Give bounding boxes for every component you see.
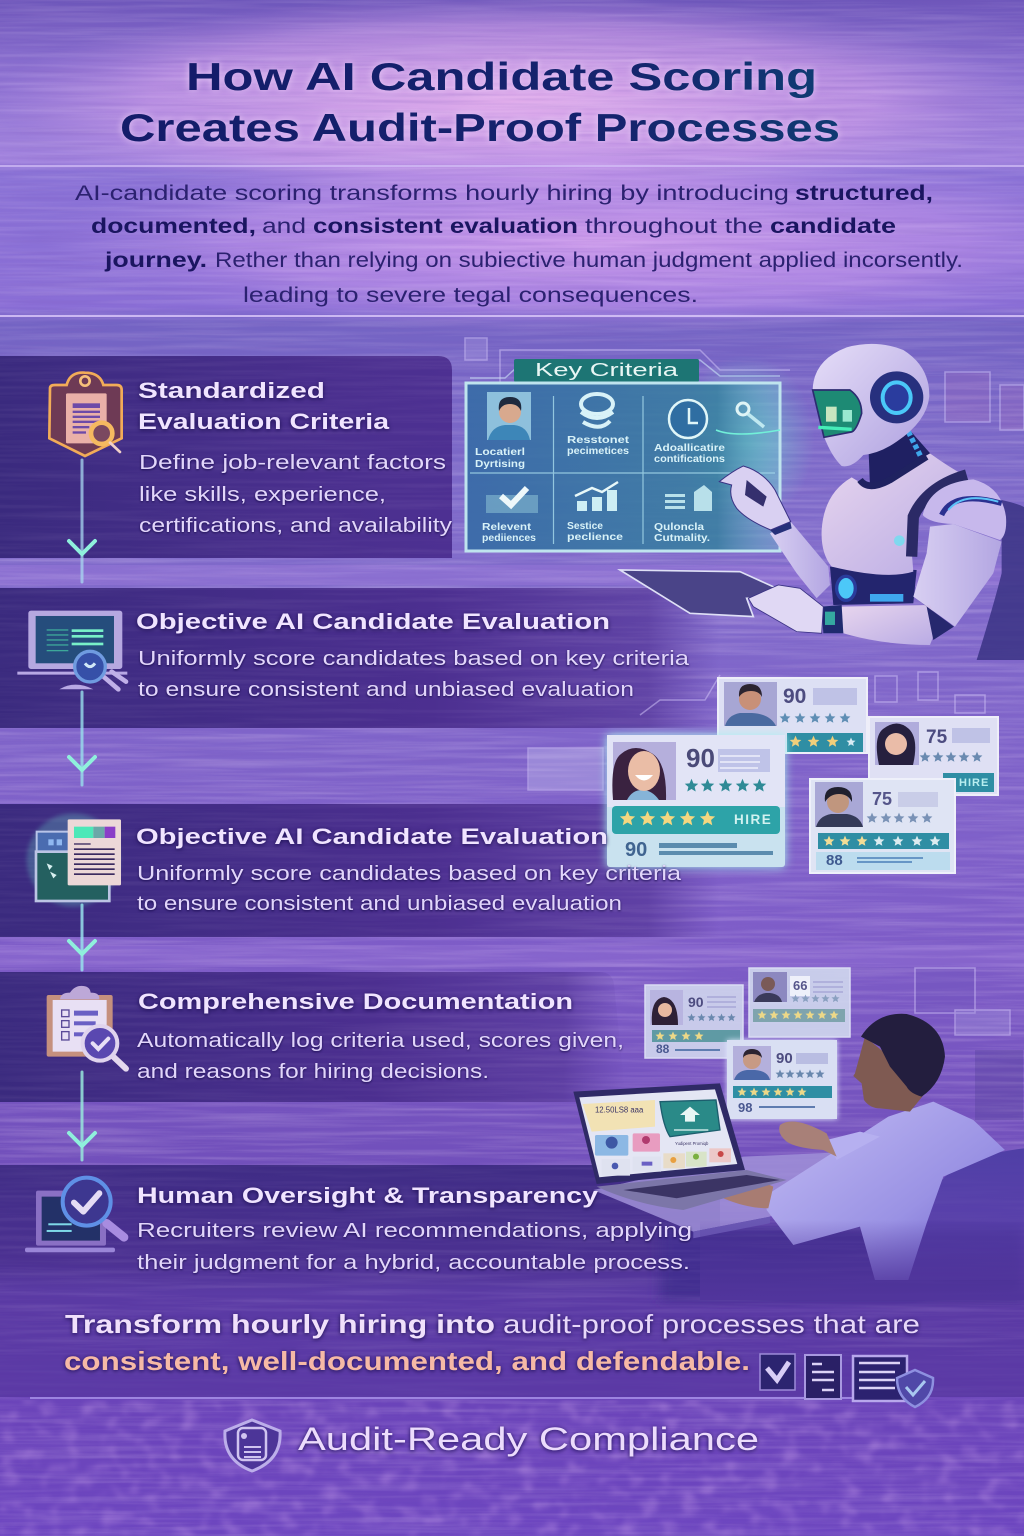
step 5 heading and text: Human Oversight & Transparency <box>137 1183 599 1208</box>
neck <box>868 427 932 487</box>
cell: clock and magnifier <box>654 400 780 465</box>
step 5 heading and text <box>137 1183 692 1274</box>
keyboard hand <box>723 1181 773 1208</box>
step 1 heading and text: like skills, experience, <box>139 483 386 506</box>
intro text: and <box>262 215 306 238</box>
intro text: journey. <box>104 249 207 272</box>
score card: front <box>727 1040 837 1119</box>
cell: data table: Quloncla <box>654 521 704 533</box>
Key Criteria panel <box>466 355 815 551</box>
cell: check mark <box>482 488 538 544</box>
closing statement: Transform hourly hiring into <box>65 1309 495 1339</box>
step 1 heading and text <box>138 378 453 537</box>
lower forearm <box>840 605 938 645</box>
step 3 heading and text: Objective AI Candidate Evaluation <box>136 824 608 849</box>
candidate score card: right <box>869 717 998 795</box>
title: How AI Candidate Scoring <box>186 56 817 99</box>
arrows between steps <box>69 460 95 1160</box>
closing statement: consistent, well-documented, and defendable. <box>64 1346 750 1376</box>
candidate score card: main <box>607 735 785 867</box>
cell: growth chart <box>567 482 623 543</box>
cell: candidate portrait <box>475 392 531 470</box>
cell: clock and magnifier: Adoallicatire <box>654 442 725 454</box>
cell: data table <box>654 485 712 544</box>
step 1 heading and text: Evaluation Criteria <box>138 409 390 434</box>
step 5 heading and text: their judgment for a hybrid, accountable process. <box>137 1251 690 1274</box>
upper arm <box>913 524 1002 627</box>
shoulder <box>912 475 967 557</box>
step 4 heading and text: Automatically log criteria used, scores given, <box>137 1029 624 1052</box>
cell: check mark: pediiences <box>482 532 536 544</box>
score card: back <box>749 968 850 1037</box>
intro text: structured, <box>795 182 933 205</box>
intro text: throughout the <box>585 215 763 238</box>
cell: growth chart: Sestice <box>567 520 603 532</box>
candidate score card: main: 90 <box>686 743 715 773</box>
candidate score card: lower right: 75 <box>872 789 892 809</box>
step 4 heading and text <box>137 989 624 1083</box>
background circuitry and faint documents <box>465 338 1024 1120</box>
step 1 heading and text: Define job-relevant factors <box>139 451 446 474</box>
score card: left: 88 <box>656 1042 670 1056</box>
title: Creates Audit-Proof Processes <box>120 107 840 150</box>
cell: growth chart: peclience <box>567 531 623 543</box>
chair <box>977 500 1024 660</box>
candidate score card: main: HIRE <box>734 812 772 827</box>
raised hand <box>779 1121 837 1157</box>
candidate score card: lower right <box>810 779 955 873</box>
title <box>120 56 840 150</box>
score card: back: 66 <box>793 978 807 993</box>
desk <box>593 1153 847 1232</box>
score card: left: 90 <box>688 994 704 1010</box>
cell: candidate portrait: Dyrtising <box>475 458 525 470</box>
recruiter at laptop illustration <box>573 1014 1024 1280</box>
man head <box>853 1037 925 1112</box>
cell: check mark: Relevent <box>482 521 532 533</box>
cell: stacked records: Resstonet <box>567 434 630 446</box>
Key Criteria tab <box>514 359 699 382</box>
recruiter at laptop illustration: 12.50LS8 aaa <box>595 1106 644 1115</box>
candidate score card: lower right: 88 <box>826 852 843 869</box>
icon: step 3 documents <box>27 813 121 907</box>
score card: front: 98 <box>738 1100 752 1115</box>
step 1 heading and text: certifications, and availability <box>139 514 453 537</box>
step 2 heading and text: to ensure consistent and unbiased evaluation <box>138 678 634 701</box>
raised hand <box>719 466 791 530</box>
raised forearm <box>770 522 830 598</box>
step 3 heading and text <box>136 824 682 915</box>
step 2 heading and text: Uniformly score candidates based on key criteria <box>138 647 690 670</box>
laptop <box>597 1170 787 1210</box>
closing statement <box>64 1309 920 1376</box>
robot illustration <box>620 344 1024 660</box>
helmet <box>813 344 929 466</box>
tablet <box>620 570 797 617</box>
icons: compliance documents <box>760 1354 933 1407</box>
intro text: Rether than relying on subiective human judgment applied incorsently. <box>215 249 963 272</box>
step 5 heading and text: Recruiters review AI recommendations, applying <box>137 1219 692 1242</box>
score card: front: 90 <box>776 1050 793 1067</box>
icon: step 2 monitor with magnifier <box>17 611 127 689</box>
intro text: leading to severe tegal consequences. <box>243 284 698 307</box>
step 1 heading and text: Standardized <box>138 378 325 403</box>
score card: left <box>645 985 743 1058</box>
Key Criteria tab: Key Criteria <box>535 360 679 380</box>
step 4 heading and text: Comprehensive Documentation <box>138 989 573 1014</box>
torso <box>822 453 967 575</box>
intro text: consistent evaluation <box>313 215 578 238</box>
cell: data table: Cutmality. <box>654 532 710 544</box>
intro text: candidate <box>770 215 896 238</box>
man torso and arms <box>767 1102 1005 1280</box>
cell: clock and magnifier: contifications <box>654 453 725 465</box>
abdomen <box>830 567 917 605</box>
cell: stacked records <box>567 394 630 457</box>
candidate score card: top <box>718 678 867 753</box>
candidate score card: top: 90 <box>783 685 806 708</box>
step 4 heading and text: and reasons for hiring decisions. <box>137 1060 489 1083</box>
cell: stacked records: pecimetices <box>567 445 629 457</box>
candidate score card: right: HIRE <box>959 777 989 789</box>
lower hand <box>748 585 823 633</box>
candidate score card: main: 90 <box>625 839 647 861</box>
intro text: AI-candidate scoring transforms hourly hiring by introducing <box>75 182 789 205</box>
step 3 heading and text: to ensure consistent and unbiased evaluation <box>137 892 622 915</box>
footer: Audit-Ready Compliance: Audit-Ready Compliance <box>298 1421 759 1457</box>
candidate score cards near recruiter <box>645 968 850 1119</box>
panel: step backgrounds <box>0 356 1024 1397</box>
fade below recruiter <box>700 1220 1024 1300</box>
intro text: documented, <box>91 215 256 238</box>
chair <box>907 1148 1024 1280</box>
icon: step 4 clipboard with check <box>47 986 126 1069</box>
candidate score card: right: 75 <box>926 727 948 748</box>
step 3 heading and text: Uniformly score candidates based on key criteria <box>137 862 682 885</box>
icon: step 5 laptop with magnifier <box>25 1178 124 1252</box>
footer: shield icon <box>225 1420 280 1471</box>
step 2 heading and text: Objective AI Candidate Evaluation <box>136 609 610 634</box>
intro text <box>75 182 963 307</box>
ear module <box>870 371 923 423</box>
closing statement: audit-proof processes that are <box>503 1309 920 1339</box>
recruiter at laptop illustration: Yudipent Promiqb <box>675 1141 709 1146</box>
icon: step 1 clipboard shield <box>49 373 122 456</box>
step 2 heading and text <box>136 609 690 701</box>
cell: candidate portrait: Locatierl <box>475 446 525 458</box>
